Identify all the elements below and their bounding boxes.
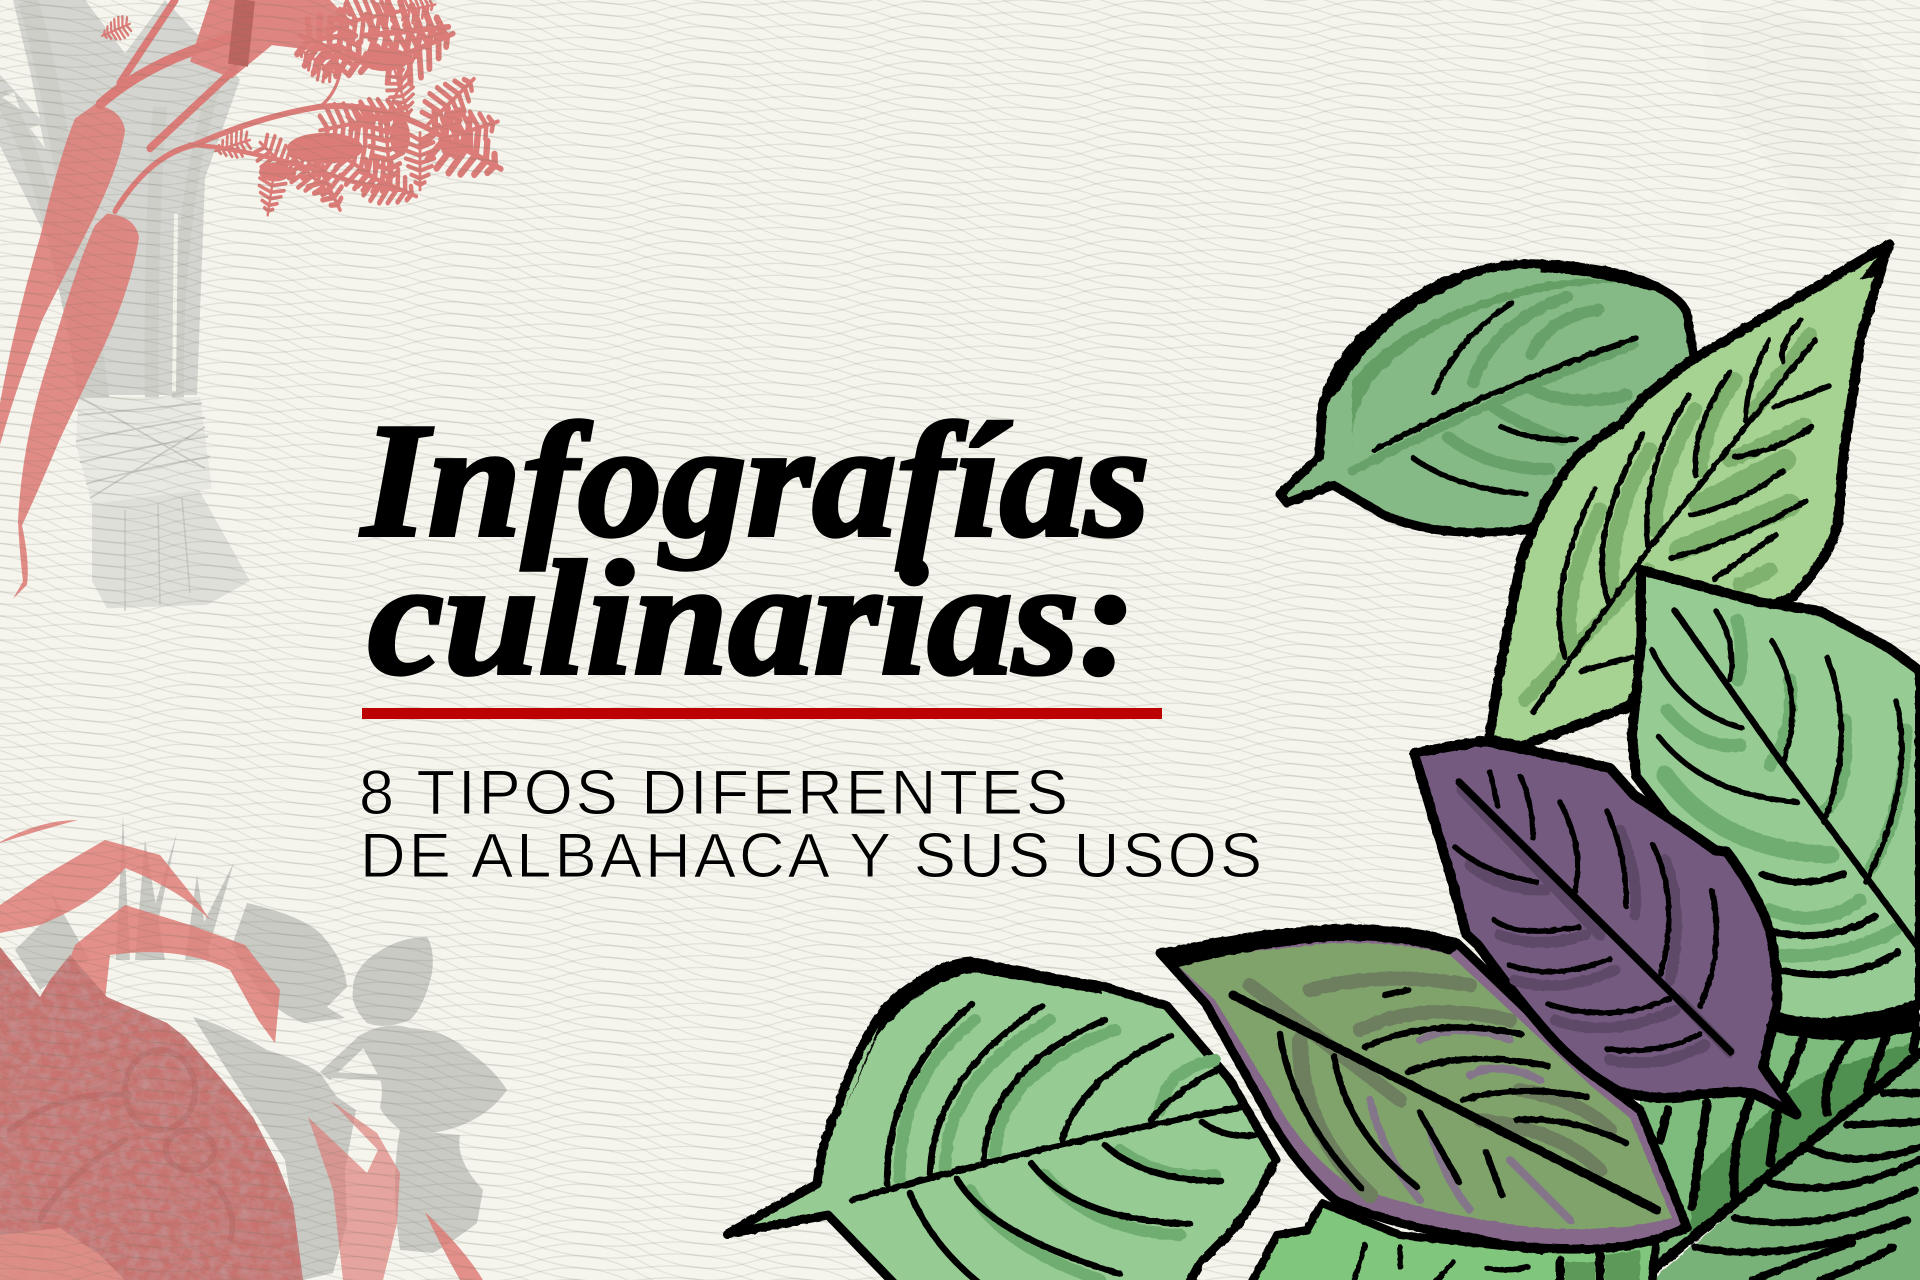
leaf: purple leaf [1414,741,1797,1115]
title: culinarias: [368,529,1136,709]
illustration: asparagus bundle [0,0,250,611]
illustration: red cabbage mass [0,947,303,1280]
illustration: carrot tops [99,0,512,221]
title: Infografías [360,391,1150,571]
subtitle: DE ALBAHACA Y SUS USOS [360,821,1262,891]
illustration: gray herb leaves [15,815,507,1280]
illustration: basil leaves [727,240,1920,1280]
leaf: bottom bright green leaf [1243,1200,1660,1280]
red divider [362,708,1162,719]
leaf: top green leaf [1280,260,1694,532]
title [360,391,1150,709]
leaf: left large green leaf [727,957,1276,1280]
leaf: pale green leaf [1489,240,1889,746]
subtitle [359,758,1262,891]
faint paper texture top right [1700,12,1920,240]
leaf: olive leaf with purple edge [1160,924,1687,1249]
illustration: red claws [0,820,483,1280]
subtitle: 8 TIPOS DIFERENTES [359,758,1068,828]
leaf: large right green leaf [1632,570,1920,1040]
leaf: dark lower green leaf [1640,1000,1920,1280]
illustration: carrots [0,104,139,599]
